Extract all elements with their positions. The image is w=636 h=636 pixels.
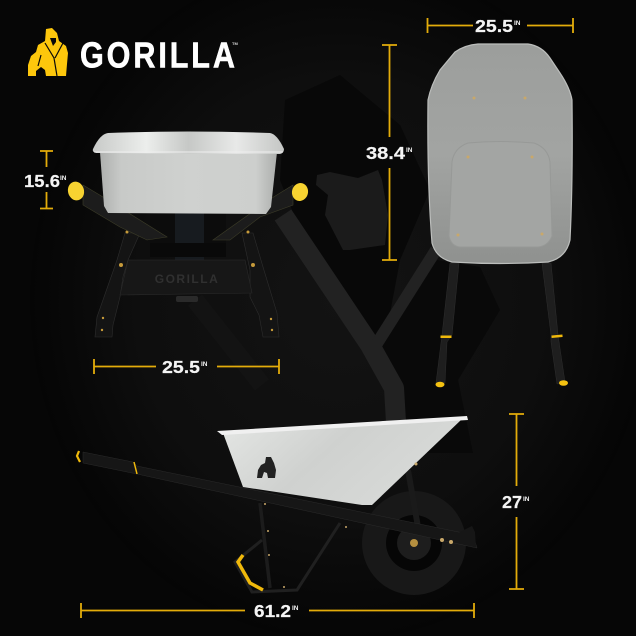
dimension: front height 15.6 in: IN [60,175,67,182]
dimension: side height 27 in: IN [523,496,530,503]
panel: side view wheelbarrow [77,416,477,595]
frame [77,451,477,592]
dimension: front width 25.5 in [94,357,279,377]
rivets [456,96,544,236]
dimension: side length 61.2 in: 61.2 [254,601,291,621]
wordmark: GORILLA: GORILLA [80,36,238,76]
tray floor [449,142,552,247]
logo: Gorilla brand [28,28,238,76]
dimension: top width 25.5 in: 25.5 [475,16,513,36]
dimension: side height 27 in: 27 [502,492,522,512]
dimension: front height 15.6 in [24,151,67,209]
dimension: front width 25.5 in: 25.5 [162,357,200,377]
wheel [362,491,466,595]
dimension: top length 38.4 in: 38.4 [366,143,405,163]
panel: front view wheelbarrow [66,132,310,337]
dimension: front height 15.6 in: 15.6 [24,171,60,191]
panel: top view wheelbarrow [428,44,572,387]
handles [436,263,568,387]
dimension: side length 61.2 in [81,601,474,621]
trademark: TM [232,41,238,46]
dimension: top length 38.4 in: IN [406,147,413,154]
tray [428,44,572,264]
wheel strut [405,470,421,527]
tub [93,132,284,214]
dimension: front width 25.5 in: IN [201,361,208,368]
dimension: side length 61.2 in: IN [292,605,299,612]
dimension: top length 38.4 in [366,45,413,260]
dimension: top width 25.5 in [428,16,573,36]
icon: gorilla mark [28,28,68,76]
handles [66,180,310,240]
front legs and stand [95,213,279,337]
plate logo text: GORILLA [155,272,219,286]
icon: gorilla on tub [257,457,276,478]
dimension: side height 27 in [502,414,530,589]
tub [217,416,468,505]
dimension: top width 25.5 in: IN [514,20,521,27]
